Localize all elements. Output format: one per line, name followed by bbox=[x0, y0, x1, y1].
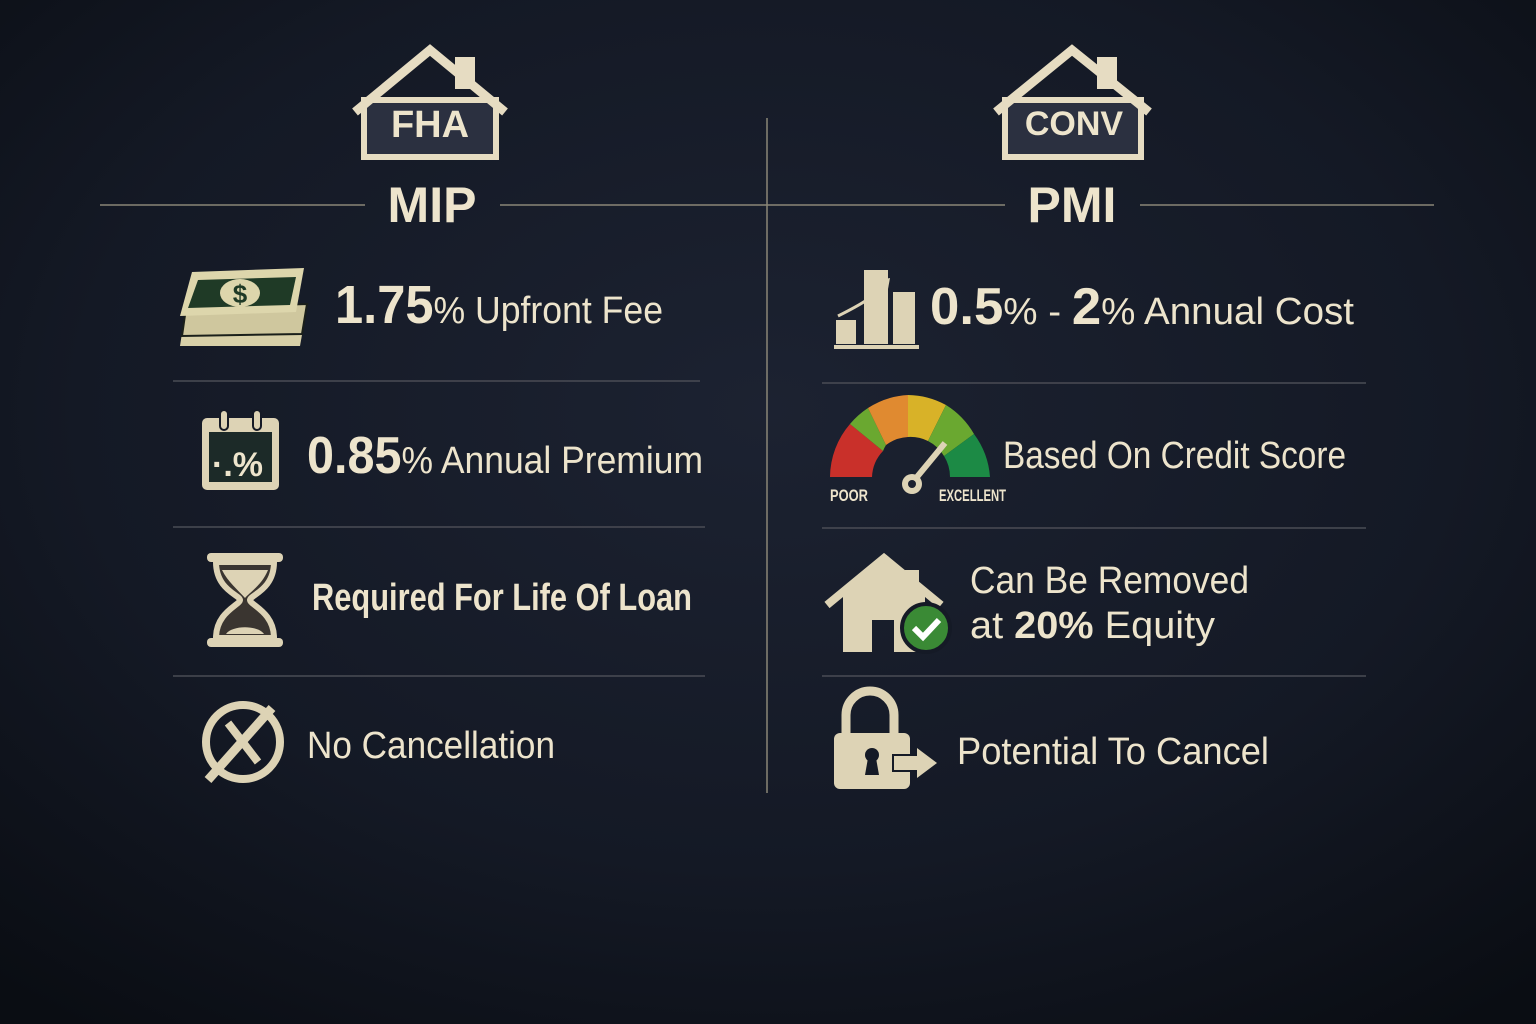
icon: credit gauge bbox=[830, 395, 1006, 505]
text: life of loan: Required For Life Of Loan bbox=[312, 577, 692, 619]
icon: credit gauge: EXCELLENT bbox=[939, 486, 1006, 505]
icon: credit gauge: POOR bbox=[830, 486, 868, 505]
text: potential to cancel: Potential To Cancel bbox=[957, 731, 1269, 773]
icon: FHA house: FHA bbox=[391, 104, 469, 146]
icon: money bbox=[180, 268, 307, 346]
icon: CONV house: CONV bbox=[1025, 105, 1123, 143]
text: annual cost: 0.5% - 2% Annual Cost bbox=[930, 278, 1354, 336]
icon: calendar percent: ·.% bbox=[212, 446, 263, 484]
text: annual premium: 0.85% Annual Premium bbox=[307, 427, 703, 485]
text: removed at 20%: at 20% Equity bbox=[970, 605, 1215, 647]
icon: no cancellation bbox=[206, 705, 280, 780]
heading: PMI: PMI bbox=[1028, 177, 1116, 233]
icon: money: $ bbox=[233, 279, 248, 309]
icon: calendar percent bbox=[202, 410, 279, 490]
text: credit score: Based On Credit Score bbox=[1003, 435, 1346, 477]
icon: CONV house bbox=[996, 50, 1149, 157]
icon: house check bbox=[827, 558, 950, 652]
text: no cancellation: No Cancellation bbox=[307, 725, 555, 767]
icon: hourglass bbox=[207, 553, 283, 647]
icon: FHA house bbox=[355, 50, 505, 157]
icon: lock arrow bbox=[834, 691, 937, 789]
text: upfront fee: 1.75% Upfront Fee bbox=[335, 275, 663, 335]
text: removed at 20% bbox=[970, 560, 1249, 647]
text: removed at 20%: Can Be Removed bbox=[970, 560, 1249, 602]
icon: bar chart bbox=[834, 270, 919, 349]
heading: MIP: MIP bbox=[388, 177, 476, 233]
